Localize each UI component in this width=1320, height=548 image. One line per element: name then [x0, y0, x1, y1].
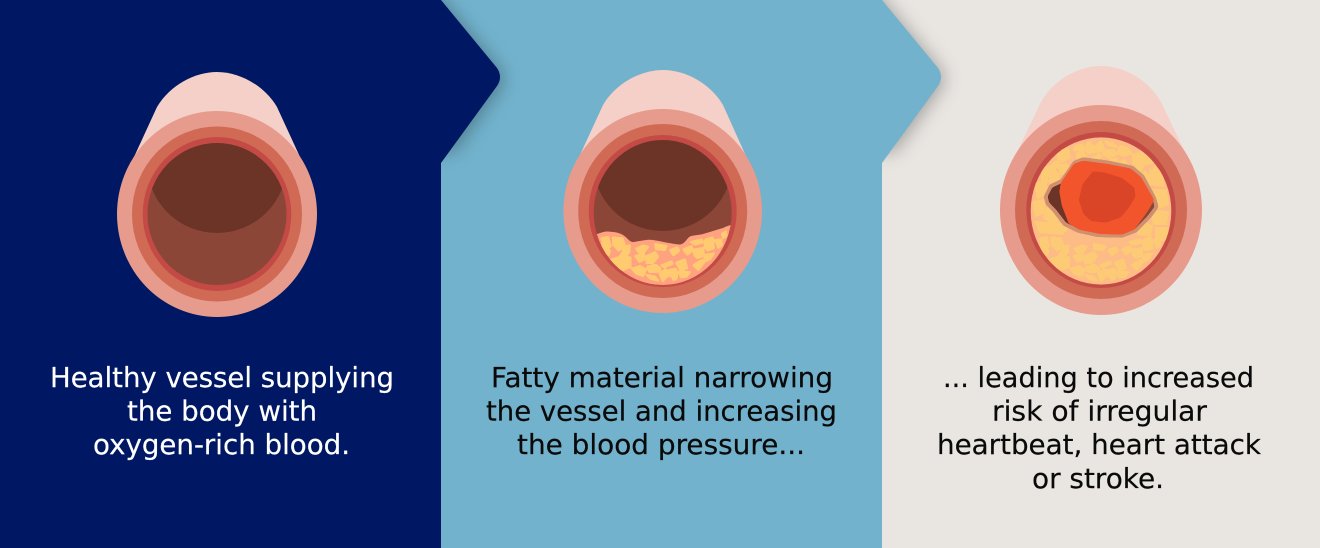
caption: healthy vessel: Healthy vessel supplying [50, 361, 394, 394]
clot in narrowed lumen [1047, 160, 1156, 235]
caption: fatty material: the vessel and increasing [486, 394, 837, 428]
caption: healthy vessel [50, 361, 394, 461]
clot outer [1061, 162, 1152, 233]
caption: increased risk: heartbeat, heart attack [937, 428, 1262, 461]
caption: fatty material [486, 361, 837, 461]
caption: healthy vessel: the body with [127, 394, 317, 428]
caption: increased risk: or stroke. [1032, 462, 1164, 495]
lumen interior [1048, 161, 1154, 234]
clot core [1080, 172, 1134, 222]
caption: healthy vessel: oxygen-rich blood. [93, 428, 350, 461]
lumen rim [1047, 160, 1156, 235]
panel: fatty material narrowing [441, 0, 941, 548]
caption: fatty material: Fatty material narrowing [491, 361, 833, 394]
vessel illustration: fatty plaque [563, 70, 762, 313]
caption: increased risk: ... leading to increased [943, 361, 1254, 394]
fatty tissue cells [1033, 141, 1168, 281]
caption: increased risk [937, 361, 1262, 495]
vessel illustration: healthy [117, 72, 317, 317]
caption: fatty material: the blood pressure... [517, 428, 805, 461]
fatty plaque deposit [596, 225, 731, 285]
caption: increased risk: risk of irregular [992, 394, 1207, 428]
panel: healthy vessel [0, 0, 500, 548]
vessel illustration: clot blockage [1000, 66, 1202, 315]
lumen lower wall [1125, 200, 1154, 232]
